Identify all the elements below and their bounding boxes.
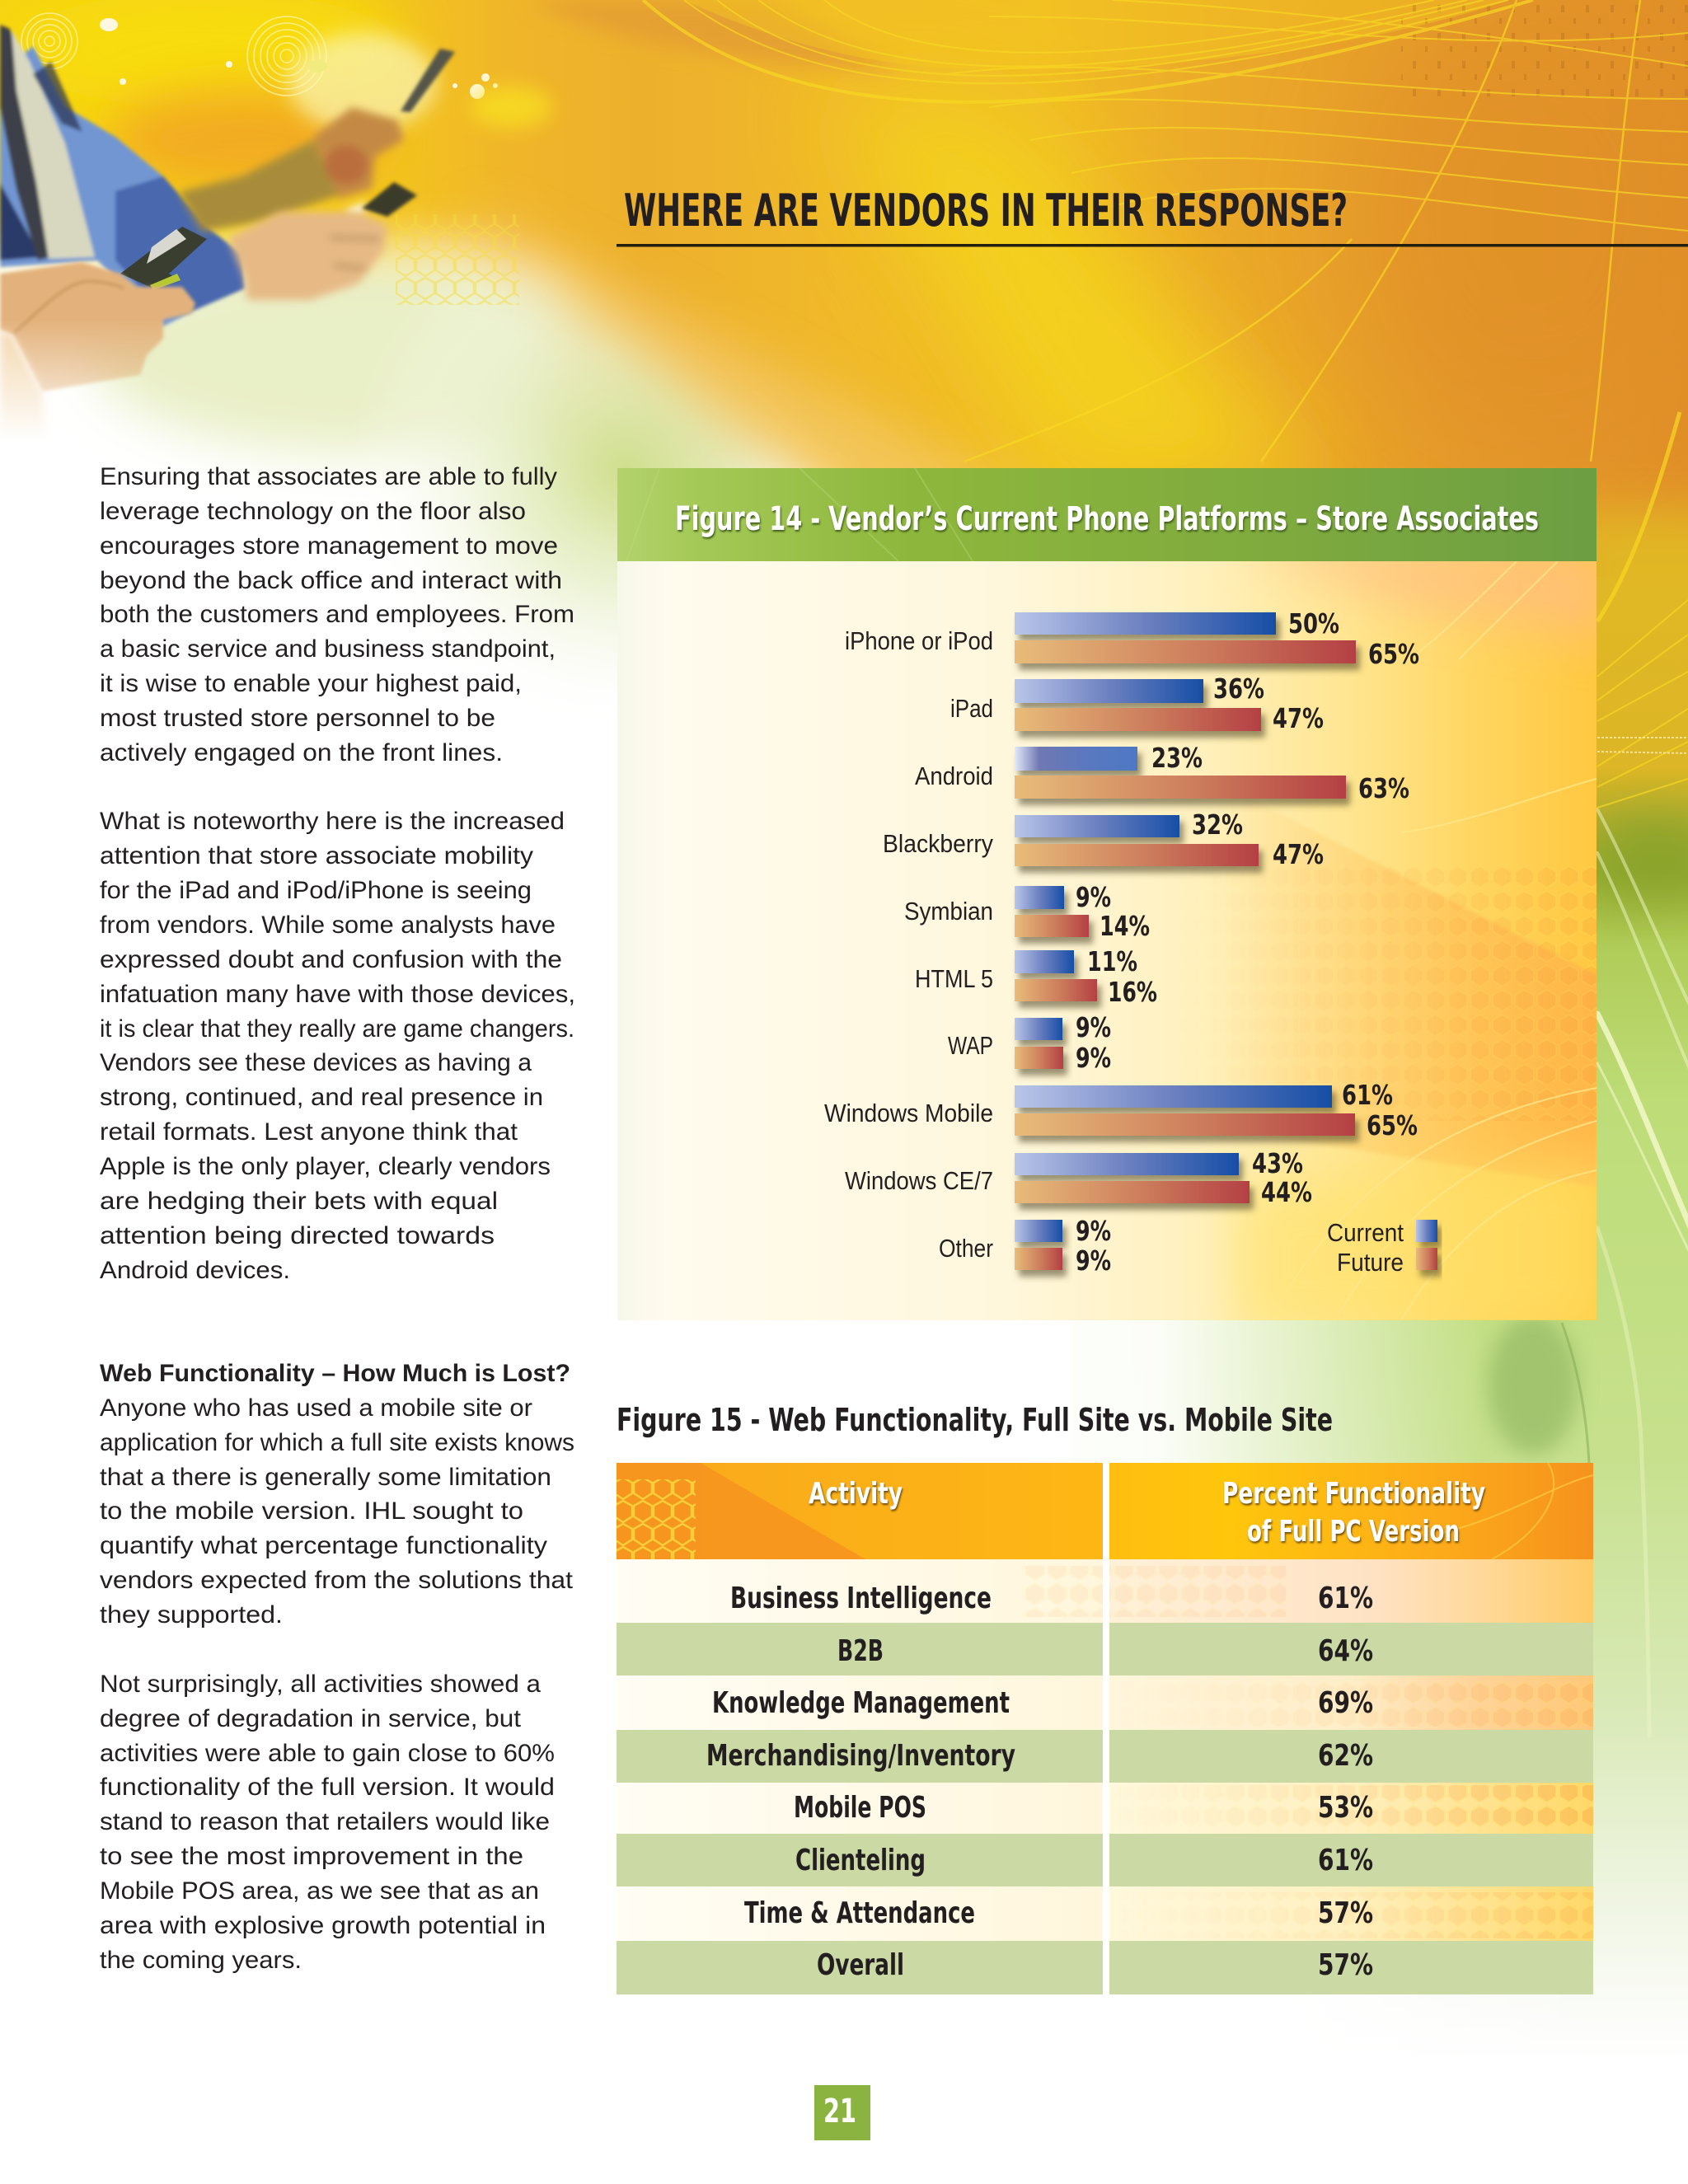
row: Time and Attendance: Time & Attendance — [744, 1896, 975, 1930]
row: Mobile POS — [794, 1791, 1373, 1825]
row: Overall: Overall — [817, 1948, 904, 1982]
row: B2B — [837, 1634, 1373, 1668]
bar row: Symbian: Symbian — [904, 897, 993, 926]
row: Merchandising/Inventory: 62% — [1318, 1739, 1373, 1773]
bar row: Blackberry — [883, 808, 1324, 870]
text block: first paragraph: leverage technology on the floor also — [100, 498, 526, 525]
row: B2B: 64% — [1318, 1634, 1373, 1668]
photo backdrop: glowing yellow with concentric rings — [8, 0, 552, 305]
text block: web functionality paragraph: application for which a full site exists knows — [100, 1429, 574, 1456]
text block: second paragraph: What is noteworthy here is the increased — [100, 808, 565, 835]
text block: closing paragraph: Mobile POS area, as we see that as an — [100, 1877, 539, 1905]
legend: current and future: Current — [1327, 1218, 1404, 1247]
bar row: iPhone or iPod: 65% — [1368, 638, 1419, 670]
heading underline — [617, 244, 1688, 247]
bar row: Blackberry: Blackberry — [883, 829, 993, 858]
text block: closing paragraph: area with explosive growth potential in — [100, 1912, 546, 1939]
row: Business Intelligence: 61% — [1318, 1582, 1373, 1615]
bar row: Windows CE/7: Windows CE/7 — [845, 1166, 993, 1195]
bar row: Windows Mobile: Windows Mobile — [824, 1099, 993, 1127]
man in blue jacket with tie — [0, 25, 245, 326]
text block: web functionality paragraph: that a there is generally some limitation — [100, 1464, 551, 1491]
row: Overall — [817, 1948, 1373, 1982]
upper arm and hand, blurred — [179, 107, 404, 232]
bar row: Other: 9% — [1076, 1244, 1111, 1277]
bar row: iPad — [950, 673, 1324, 734]
text block: closing paragraph: the coming years. — [100, 1947, 302, 1974]
legend: current and future — [1327, 1218, 1437, 1277]
text block: closing paragraph: degree of degradation in service, but — [100, 1705, 522, 1732]
text block: second paragraph: from vendors. While some analysts have — [100, 912, 556, 939]
light streaks are part of the wash — [1597, 809, 1688, 1736]
dark olive patch in right margin — [1591, 816, 1688, 898]
table row backgrounds — [617, 1559, 1593, 1994]
row: Clienteling: Clienteling — [795, 1844, 926, 1877]
text block: second paragraph: Apple is the only player, clearly vendors — [100, 1153, 551, 1180]
bar row: Blackberry: 32% — [1192, 808, 1243, 841]
panel: figure 14 bar chart — [617, 468, 1615, 1335]
bar row: iPhone or iPod: iPhone or iPod — [845, 626, 993, 655]
text block: second paragraph: Vendors see these devices as having a — [100, 1049, 532, 1076]
row: Knowledge Management — [712, 1686, 1373, 1720]
bar row: Android: 23% — [1151, 742, 1203, 774]
text block: web functionality paragraph — [100, 1394, 574, 1629]
text block: closing paragraph: activities were able to gain close to 60% — [100, 1740, 555, 1767]
text block: second paragraph: strong, continued, and real presence in — [100, 1084, 543, 1111]
bar row: Android: Android — [915, 762, 993, 790]
middle phone — [362, 182, 417, 217]
text block: closing paragraph: functionality of the full version. It would — [100, 1774, 555, 1801]
row: Business Intelligence: Business Intelligence — [730, 1582, 992, 1615]
table column gap — [1103, 1463, 1109, 1994]
text block: closing paragraph: stand to reason that retailers would like — [100, 1808, 550, 1835]
subheading: web functionality: Web Functionality – How Much is Lost? — [100, 1360, 570, 1387]
bar row: Windows CE/7: 44% — [1261, 1176, 1312, 1208]
row: Overall: 57% — [1318, 1948, 1373, 1982]
bar row: Other — [939, 1215, 1111, 1277]
table header: of Full PC Version — [1247, 1515, 1460, 1549]
text block: web functionality paragraph: quantify what percentage functionality — [100, 1532, 547, 1559]
top phone — [401, 49, 455, 112]
bar row: WAP: 9% — [1076, 1042, 1111, 1074]
bar row: WAP: 9% — [1076, 1011, 1111, 1043]
text block: second paragraph: are hedging their bets with equal — [100, 1188, 498, 1215]
bar row: Windows CE/7 — [845, 1147, 1312, 1208]
bar row: Symbian — [904, 881, 1150, 942]
bar row: Windows Mobile: 61% — [1342, 1079, 1393, 1111]
bar row: WAP: WAP — [948, 1031, 993, 1060]
photo: hands holding mobile phones — [0, 0, 552, 437]
wave lines: yellow mesh top right — [643, 0, 1688, 808]
bar row: Symbian: 14% — [1100, 910, 1150, 942]
text block: second paragraph: it is clear that they really are game changers. — [100, 1015, 574, 1043]
chart panel background — [617, 544, 1615, 1335]
bar row: Windows CE/7: 43% — [1252, 1147, 1303, 1179]
bar row: iPhone or iPod — [845, 607, 1419, 670]
table: figure 15 web functionality — [617, 1463, 1593, 1994]
lower left sleeve — [0, 330, 45, 437]
text block: web functionality paragraph: they supported. — [100, 1601, 283, 1629]
text block: first paragraph: encourages store management to move — [100, 532, 558, 560]
text block: second paragraph: infatuation many have with those devices, — [100, 981, 575, 1008]
bar row: Android — [915, 742, 1409, 804]
heading: figure 15: Figure 15 - Web Functionality, Full Site vs. Mobile Site — [617, 1402, 1333, 1438]
bar row: HTML 5: HTML 5 — [915, 964, 993, 993]
row: Mobile POS: Mobile POS — [794, 1791, 926, 1825]
bar row: Symbian: 9% — [1076, 881, 1111, 913]
row: Knowledge Management: 69% — [1318, 1686, 1373, 1720]
bar row: iPad: iPad — [950, 694, 993, 723]
bar row: HTML 5: 11% — [1087, 945, 1137, 977]
middle hand — [228, 212, 387, 300]
bar row: Windows Mobile: 65% — [1367, 1109, 1418, 1141]
text block: second paragraph: expressed doubt and confusion with the — [100, 946, 562, 973]
text block: web functionality paragraph: to the mobile version. IHL sought to — [100, 1497, 523, 1525]
text block: first paragraph: a basic service and business standpoint, — [100, 635, 556, 663]
bar row: Other: Other — [939, 1234, 993, 1263]
row: Time and Attendance: 57% — [1318, 1896, 1373, 1930]
text block: second paragraph: for the iPad and iPod/iPhone is seeing — [100, 877, 532, 904]
table header — [617, 1463, 1593, 1559]
bar row: WAP — [948, 1011, 1111, 1074]
front hand — [0, 262, 195, 391]
dotted streaks in right margin — [1597, 738, 1688, 753]
heading: where are vendors in their response: WHERE ARE VENDORS IN THEIR RESPONSE? — [624, 185, 1348, 237]
bar row: iPad: 36% — [1213, 673, 1264, 705]
legend: current and future: Future — [1337, 1248, 1404, 1277]
row: Merchandising/Inventory — [706, 1739, 1373, 1773]
table header: Percent Functionality — [1222, 1477, 1485, 1511]
text block: web functionality paragraph: vendors expected from the solutions that — [100, 1567, 574, 1594]
page number badge — [814, 2085, 870, 2140]
text block: second paragraph — [100, 808, 575, 1284]
chart title banner — [617, 468, 1597, 561]
bar row: iPhone or iPod: 50% — [1288, 607, 1339, 640]
text block: closing paragraph — [100, 1671, 555, 1974]
table header: Activity — [809, 1477, 903, 1511]
bar row: Android: 63% — [1358, 772, 1409, 804]
text block: first paragraph: most trusted store personnel to be — [100, 705, 495, 732]
text block: second paragraph: retail formats. Lest anyone think that — [100, 1118, 518, 1146]
text block: web functionality paragraph: Anyone who has used a mobile site or — [100, 1394, 532, 1422]
row: B2B: B2B — [837, 1634, 884, 1668]
text block: first paragraph: Ensuring that associates are able to fully — [100, 463, 557, 490]
row: Merchandising/Inventory: Merchandising/Inventory — [706, 1739, 1015, 1773]
text block: first paragraph: both the customers and employees. From — [100, 601, 574, 628]
text block: first paragraph: actively engaged on the front lines. — [100, 739, 503, 766]
row: Time and Attendance — [744, 1896, 1373, 1930]
bar row: iPad: 47% — [1273, 702, 1324, 734]
text block: second paragraph: Android devices. — [100, 1257, 290, 1284]
bar row: Blackberry: 47% — [1273, 838, 1324, 870]
text block: second paragraph: attention that store associate mobility — [100, 842, 533, 869]
bar row: HTML 5 — [915, 945, 1157, 1008]
text block: second paragraph: attention being directed towards — [100, 1222, 495, 1249]
text block: first paragraph: beyond the back office and interact with — [100, 567, 562, 594]
row: Clienteling — [795, 1844, 1373, 1877]
text block: first paragraph: it is wise to enable your highest paid, — [100, 670, 522, 697]
row: Business Intelligence — [730, 1582, 1373, 1615]
bar row: Windows Mobile — [824, 1079, 1418, 1141]
text block: closing paragraph: Not surprisingly, all activities showed a — [100, 1671, 541, 1698]
text block: closing paragraph: to see the most improvement in the — [100, 1843, 523, 1870]
row: Knowledge Management: Knowledge Management — [712, 1686, 1010, 1720]
page number badge: 21 — [823, 2093, 856, 2130]
bar row: HTML 5: 16% — [1108, 976, 1157, 1008]
bar row: Other: 9% — [1076, 1215, 1111, 1247]
row: Mobile POS: 53% — [1318, 1791, 1373, 1825]
text block: first paragraph — [100, 463, 574, 766]
row: Clienteling: 61% — [1318, 1844, 1373, 1877]
front phone — [120, 227, 207, 290]
